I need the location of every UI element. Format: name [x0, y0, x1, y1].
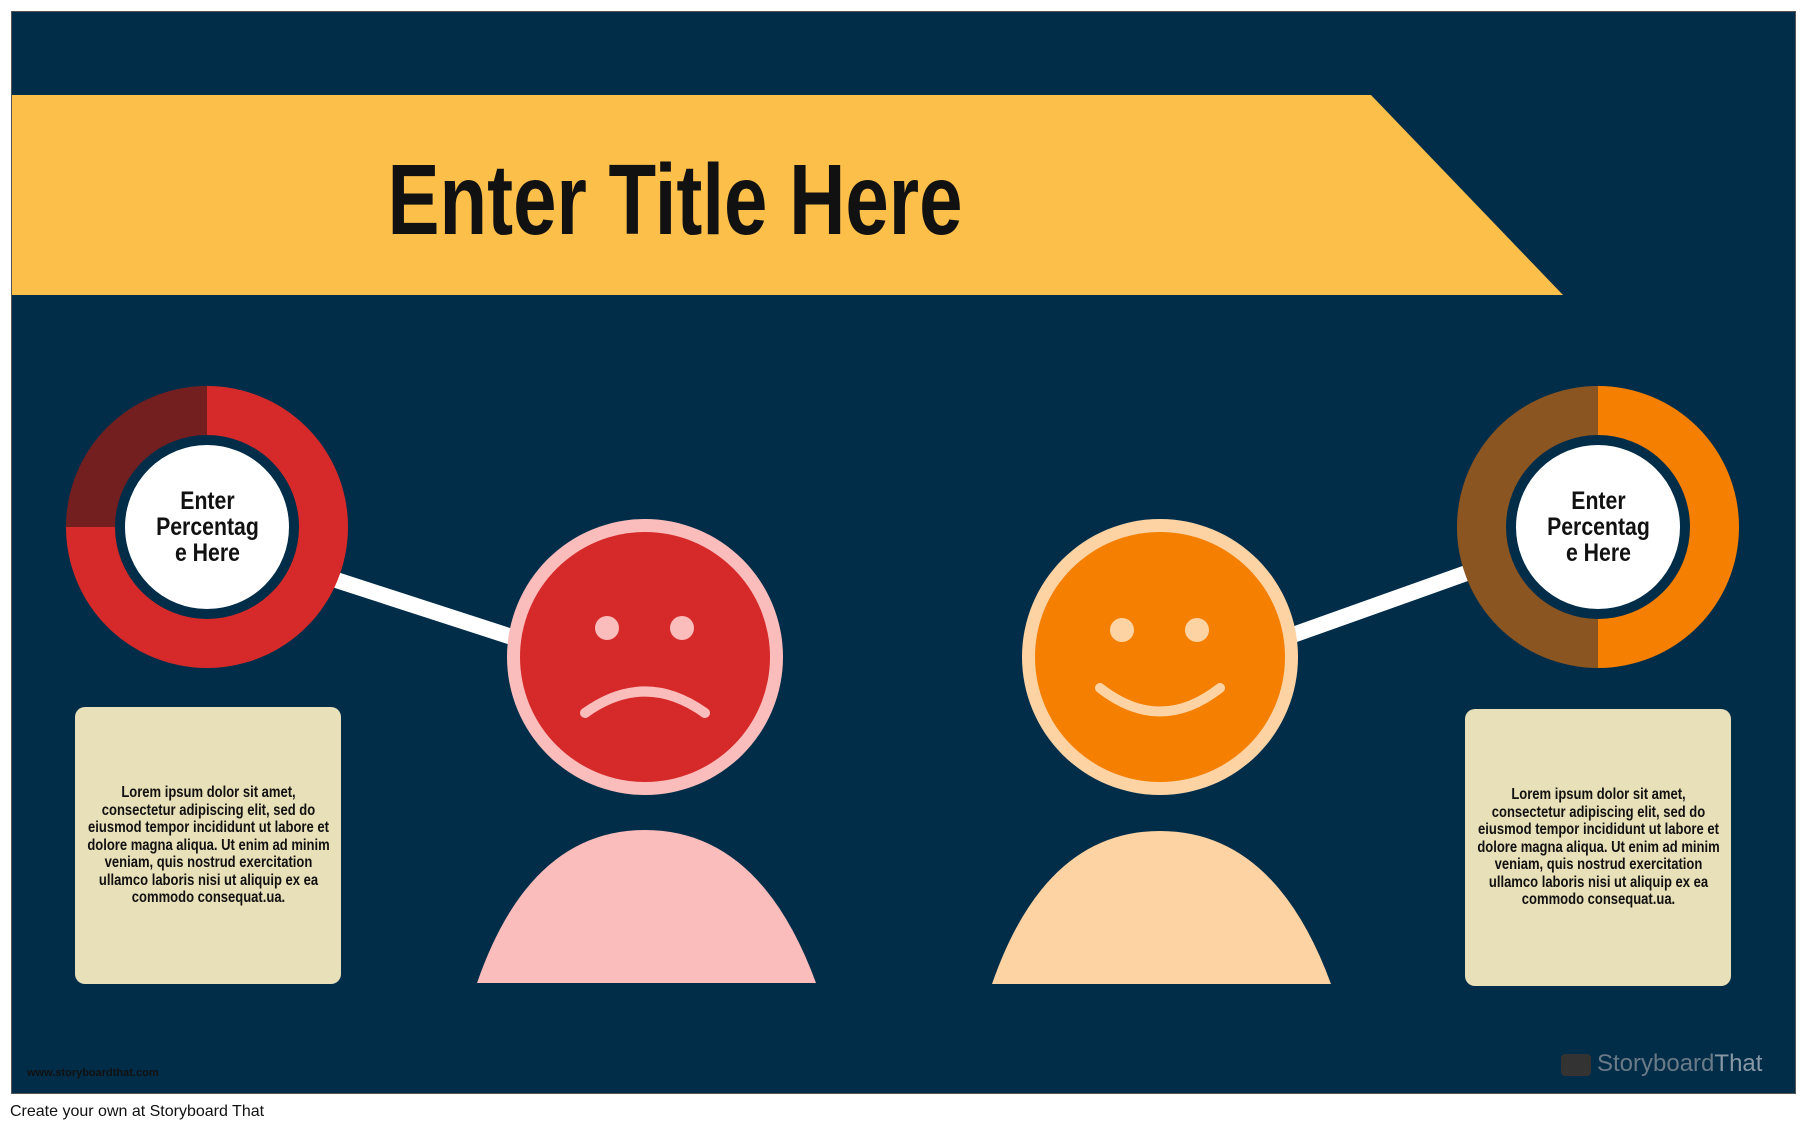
footer: Create your own at Storyboard That: [10, 1103, 264, 1120]
sad person icon: [477, 519, 816, 983]
right percentage label: [1506, 435, 1690, 619]
happy person icon: [992, 519, 1331, 984]
right text box: Lorem ipsum dolor sit amet, consectetur adipiscing elit, sed do eiusmod tempor incididunt ut labore et dolore magna aliqua. Ut enim ad minim veniam, quis nostrud exercitation ullamco laboris nisi ut aliquip ex ea commodo consequat.ua.: [1477, 786, 1719, 908]
right percentage label: e Here: [1565, 539, 1630, 567]
right text box: [1465, 709, 1731, 986]
right percentage label: Percentag: [1547, 513, 1649, 541]
left percentage label: [115, 435, 299, 619]
left percentage label: e Here: [174, 539, 239, 567]
left donut chart: [66, 386, 348, 668]
left percentage label: Percentag: [156, 513, 258, 541]
left percentage label: Enter: [180, 487, 234, 515]
watermark url: www.storyboardthat.com: [27, 1067, 159, 1079]
right donut chart: [1457, 386, 1739, 668]
left text box: Lorem ipsum dolor sit amet, consectetur adipiscing elit, sed do eiusmod tempor incididunt ut labore et dolore magna aliqua. Ut enim ad minim veniam, quis nostrud exercitation ullamco laboris nisi ut aliquip ex ea commodo consequat.ua.: [87, 784, 329, 906]
title: Enter Title Here: [387, 144, 963, 256]
left text box: [75, 707, 341, 984]
storyboardthat logo: StoryboardThat: [1597, 1050, 1762, 1077]
right percentage label: Enter: [1571, 487, 1625, 515]
